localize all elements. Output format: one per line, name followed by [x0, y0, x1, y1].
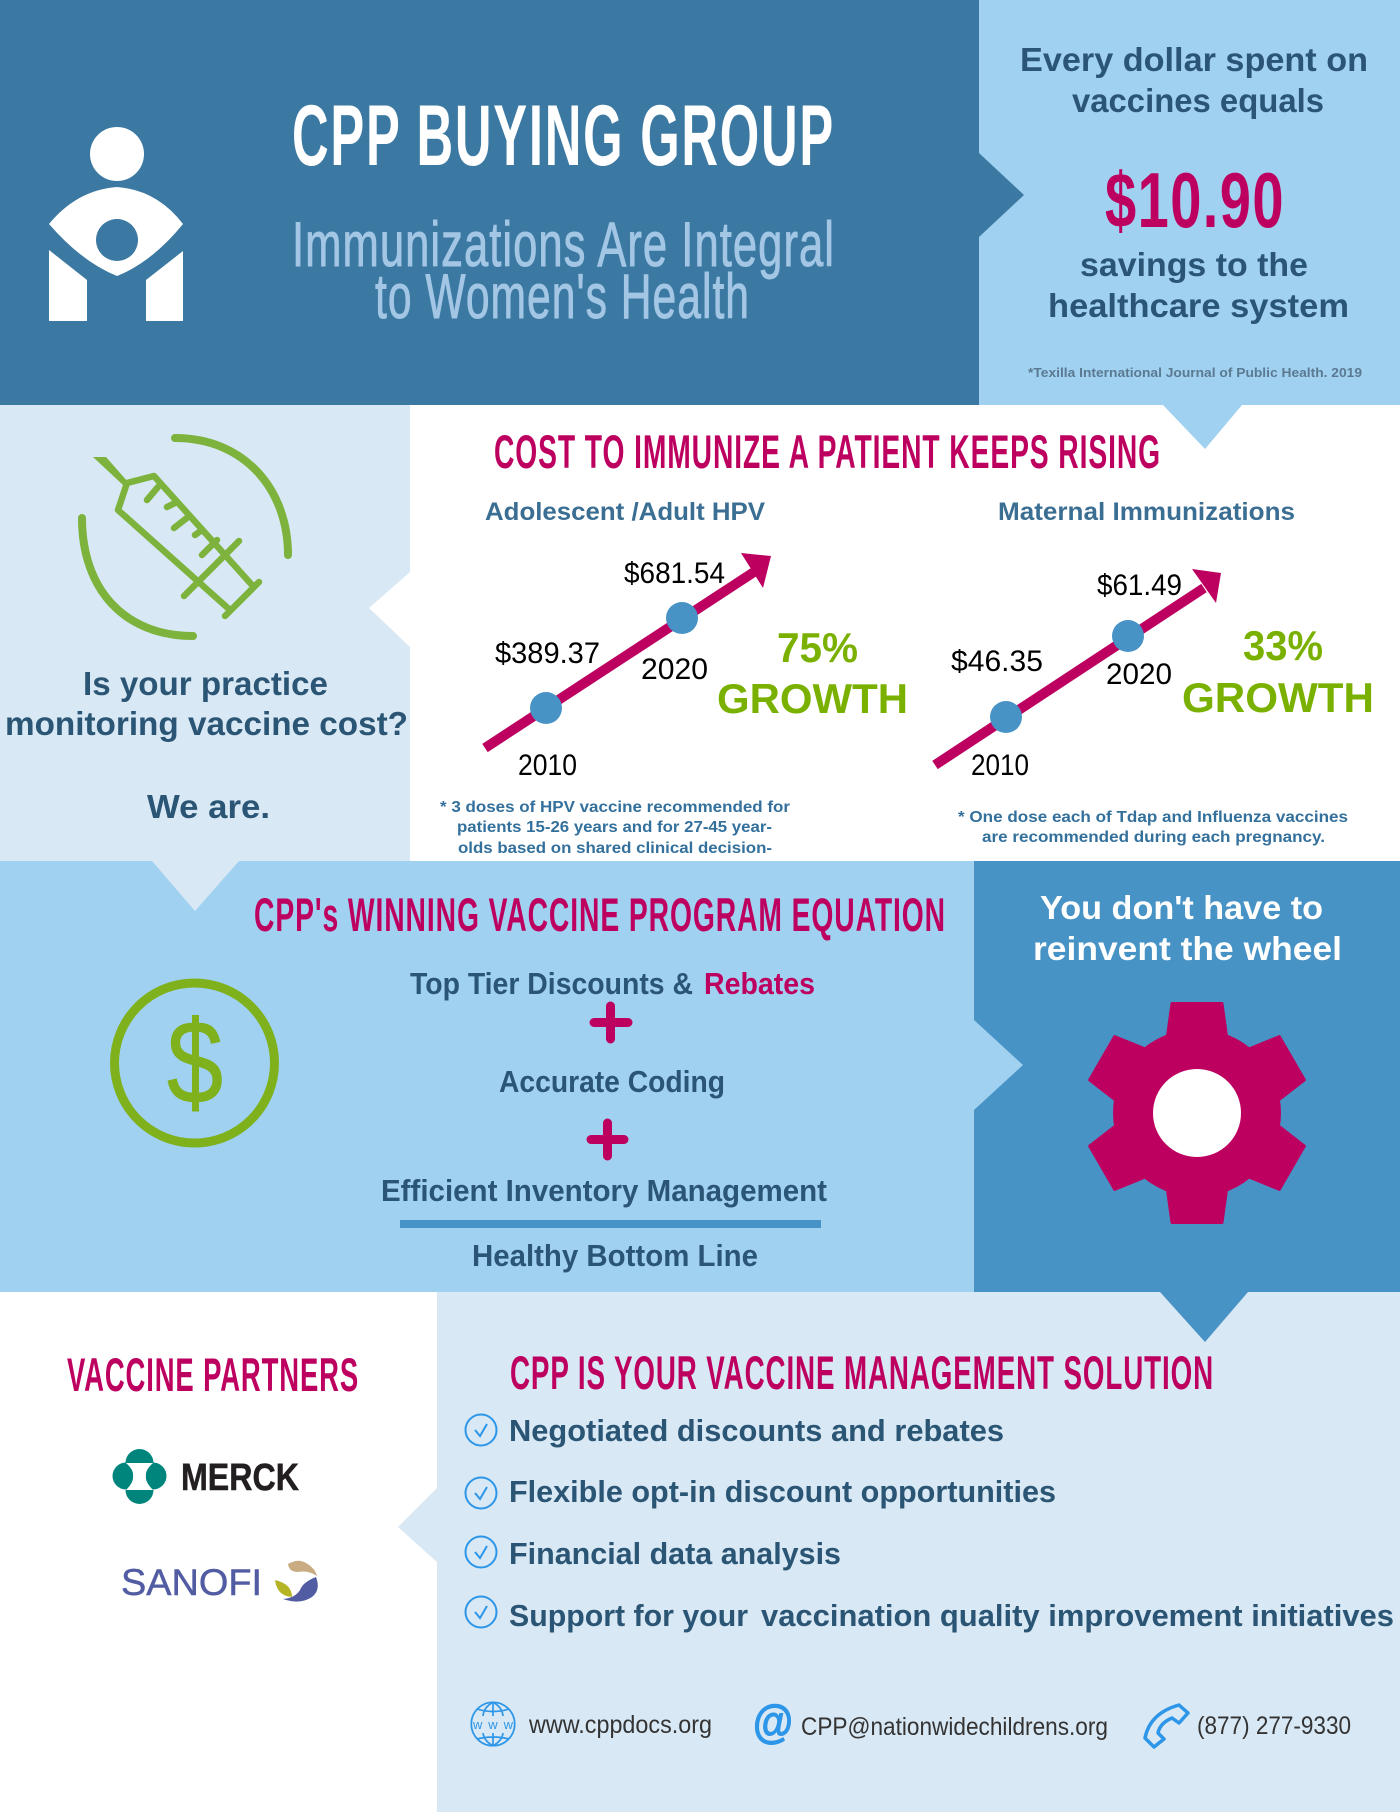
heading: equation: CPP's WINNING VACCINE PROGRAM EQUATION	[254, 888, 946, 941]
chart: adolescent adult HPV: $681.54	[624, 557, 725, 590]
heading: partners: VACCINE PARTNERS	[67, 1348, 359, 1401]
question text: We are.	[147, 788, 270, 825]
subtitle	[292, 210, 835, 332]
icon: dollar coin: $	[167, 997, 223, 1129]
chart: maternal immunizations: $46.35	[951, 645, 1043, 678]
equation lines: Top Tier Discounts &	[410, 966, 693, 1001]
equation lines: Rebates	[704, 966, 815, 1001]
text: reinvent: reinvent the wheel	[1033, 930, 1342, 967]
contact row: CPP@nationwidechildrens.org	[801, 1713, 1108, 1741]
chart: maternal immunizations: 2020	[1106, 658, 1172, 691]
icon: globe	[471, 1702, 515, 1746]
callout: savings text: $10.90	[1105, 156, 1285, 244]
footnote: HPV: making.	[587, 860, 647, 877]
chart: adolescent adult HPV: 2010	[518, 749, 577, 782]
subtitle: Immunizations Are Integral	[292, 210, 835, 280]
chart: maternal immunizations: 33%	[1243, 622, 1323, 669]
callout: savings text: Every dollar spent on	[1020, 41, 1368, 78]
equation lines: Healthy Bottom Line	[472, 1238, 758, 1273]
panel: vaccine management solution	[398, 1292, 1400, 1812]
equation lines: Accurate Coding	[499, 1064, 725, 1099]
logo: Merck	[112, 1449, 299, 1504]
footnote: HPV: olds based on shared clinical decision-	[458, 840, 772, 857]
chart: maternal immunizations: $61.49	[1097, 569, 1182, 602]
footnote: maternal: * One dose each of Tdap and Influenza vaccines	[958, 809, 1348, 826]
question text	[5, 665, 408, 825]
footnote: maternal: are recommended during each pregnancy.	[982, 829, 1325, 846]
chart: adolescent adult HPV: 75%	[777, 624, 858, 671]
panel: cost to immunize	[440, 425, 1374, 877]
panel: is your practice monitoring vaccine cost	[0, 405, 410, 861]
text: reinvent	[1033, 889, 1342, 967]
footnote: HPV	[440, 799, 790, 877]
callout: savings text: *Texilla International Journal of Public Health. 2019	[1028, 365, 1362, 380]
checklist: Negotiated discounts and rebates	[509, 1413, 1004, 1448]
contact row	[471, 1695, 1351, 1747]
icon: dollar coin	[114, 983, 274, 1143]
chart: adolescent adult HPV: 2020	[641, 653, 708, 686]
logo: Sanofi	[121, 1561, 318, 1603]
icon: CPP logo	[49, 127, 183, 321]
icon: at sign: @	[753, 1695, 793, 1747]
chart: adolescent adult HPV: Adolescent /Adult HPV	[485, 498, 765, 526]
footnote: HPV: patients 15-26 years and for 27-45 year-	[457, 819, 772, 836]
logo: Sanofi: SANOFI	[121, 1562, 262, 1603]
panel: vaccine partners	[67, 1348, 359, 1603]
checklist: Support for your	[509, 1598, 748, 1633]
equation lines	[381, 966, 827, 1273]
subtitle: to Women's Health	[375, 262, 750, 332]
text: reinvent: You don't have to	[1040, 889, 1323, 926]
logo: Merck: MERCK	[181, 1457, 299, 1499]
footnote: HPV: * 3 doses of HPV vaccine recommended for	[440, 799, 790, 816]
contact row: (877) 277-9330	[1197, 1712, 1351, 1740]
icon: globe: www	[472, 1717, 514, 1732]
callout: savings text: vaccines equals	[1072, 82, 1324, 119]
footnote: maternal	[958, 809, 1348, 846]
chart: maternal immunizations: Maternal Immunizations	[998, 498, 1295, 526]
contact row: www.cppdocs.org	[528, 1711, 712, 1739]
question text: Is your practice	[83, 665, 328, 702]
checklist: Flexible opt-in discount opportunities	[509, 1474, 1056, 1509]
chart: maternal immunizations	[935, 498, 1374, 782]
question text: monitoring vaccine cost?	[5, 705, 408, 742]
icon: gear	[1087, 1004, 1307, 1222]
panel: reinvent the wheel	[974, 861, 1400, 1292]
chart: maternal immunizations: 2010	[971, 749, 1029, 782]
checklist: vaccination quality improvement initiatives	[761, 1598, 1394, 1633]
checklist: Financial data analysis	[509, 1536, 841, 1571]
equation lines: Efficient Inventory Management	[381, 1173, 827, 1208]
title: CPP BUYING GROUP	[292, 88, 835, 184]
panel: header	[0, 0, 1024, 405]
callout: savings text: healthcare system	[1048, 287, 1349, 324]
chart: maternal immunizations: GROWTH	[1182, 674, 1374, 721]
chart: adolescent adult HPV: GROWTH	[717, 675, 908, 722]
panel: winning vaccine program equation	[0, 861, 974, 1292]
checklist	[466, 1413, 1394, 1633]
icon: phone	[1145, 1705, 1188, 1747]
panel: right savings callout	[979, 0, 1400, 449]
icon: syringe	[82, 438, 288, 636]
chart: adolescent adult HPV: $389.37	[495, 637, 600, 670]
callout: savings text	[1020, 41, 1368, 380]
chart: adolescent adult HPV	[485, 498, 908, 782]
callout: savings text: savings to the	[1080, 246, 1308, 283]
